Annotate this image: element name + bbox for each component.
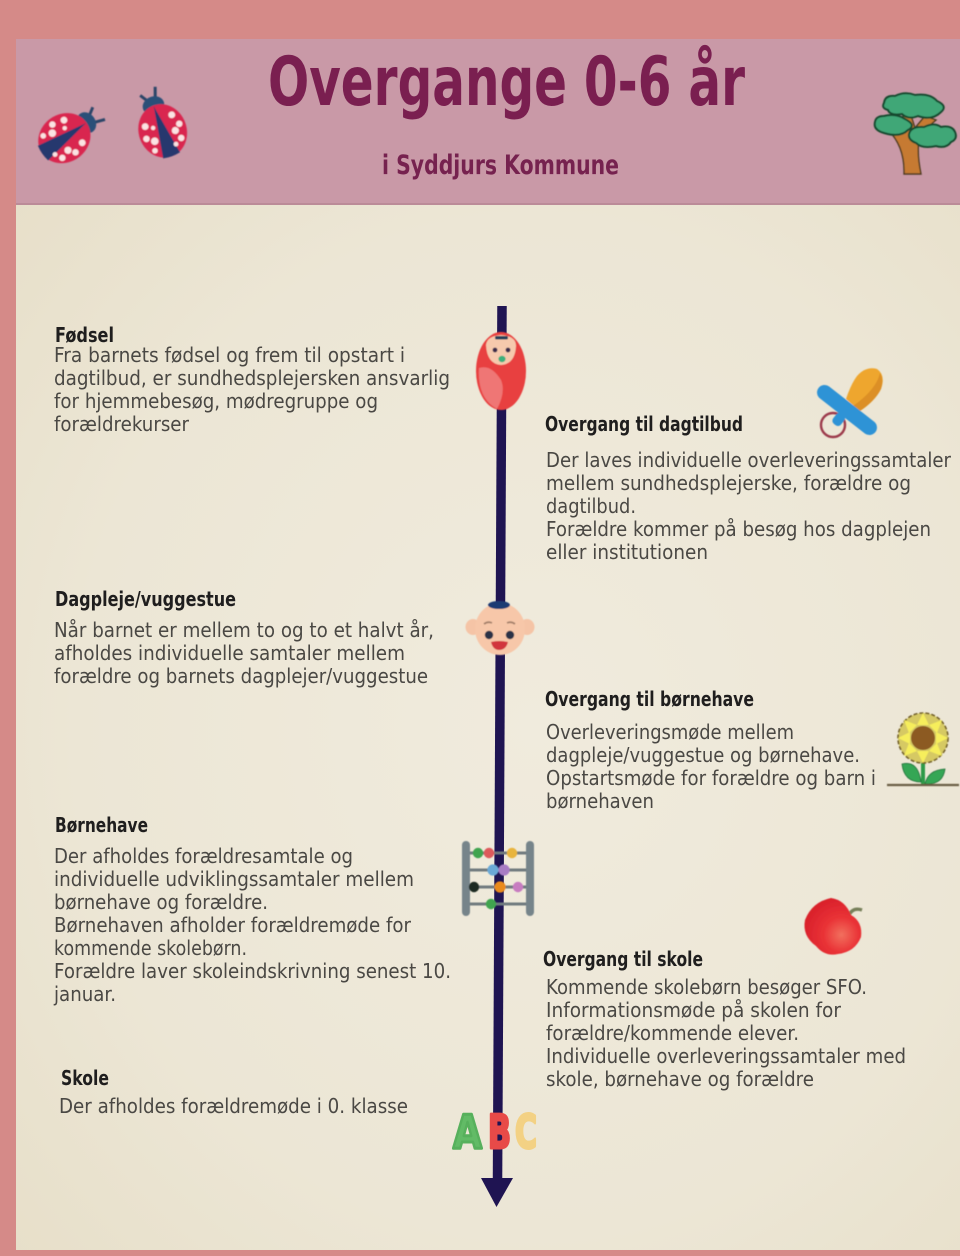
text block: Fødsel xyxy=(54,323,450,436)
timeline arrow xyxy=(481,306,513,1207)
text block: Overgang til skole xyxy=(543,947,906,1091)
text block: Skole: Der afholdes forældremøde i 0. klasse xyxy=(59,1094,408,1118)
icon: swaddled baby xyxy=(476,332,526,410)
text block: Børnehave: børnehave og forældre. xyxy=(54,890,268,914)
text block: Overgang til dagtilbud: dagtilbud. xyxy=(546,494,636,518)
icon: abacus xyxy=(462,841,534,916)
icon: ABC letters xyxy=(453,1105,537,1159)
icon: ABC letters: A xyxy=(453,1105,482,1159)
text block: Dagpleje/vuggestue: forældre og barnets dagplejer/vuggestue xyxy=(54,664,428,688)
text block: Børnehave xyxy=(53,813,451,1006)
text block: Overgang til dagtilbud: mellem sundhedsplejerske, forældre og xyxy=(546,471,911,495)
text block: Overgang til dagtilbud: Forældre kommer på besøg hos dagplejen xyxy=(546,517,931,541)
text block: Dagpleje/vuggestue xyxy=(54,587,434,688)
text block: Børnehave: individuelle udviklingssamtaler mellem xyxy=(54,867,414,891)
icon: baby head xyxy=(466,601,534,655)
text block: Overgang til skole: Individuelle overleveringssamtaler med xyxy=(546,1044,906,1068)
icon: pacifier xyxy=(814,368,883,438)
icon: tree xyxy=(875,93,956,174)
text block: Overgang til børnehave: dagpleje/vuggestue og børnehave. xyxy=(546,743,860,767)
text block: Børnehave: Der afholdes forældresamtale og xyxy=(54,844,353,868)
text block: Overgang til skole: skole, børnehave og forældre xyxy=(546,1067,814,1091)
text block: Overgang til skole: Kommende skolebørn besøger SFO. xyxy=(546,975,867,999)
icon: ABC letters: C xyxy=(515,1105,537,1159)
text block: Dagpleje/vuggestue: Dagpleje/vuggestue xyxy=(55,587,236,611)
text block: Børnehave: Børnehaven afholder forældremøde for xyxy=(54,913,412,937)
text block: Børnehave: Forældre laver skoleindskrivning senest 10. xyxy=(54,959,451,983)
text block: Fødsel: for hjemmebesøg, mødregruppe og xyxy=(54,389,378,413)
text block: Fødsel: Fra barnets fødsel og frem til opstart i xyxy=(54,343,405,367)
text block: Fødsel: Fødsel xyxy=(55,323,114,347)
text block: Børnehave: januar. xyxy=(53,982,116,1006)
text block: Skole xyxy=(59,1066,408,1118)
icon: sunflower xyxy=(887,713,959,785)
text block: Overgang til børnehave: Overleveringsmøde mellem xyxy=(546,720,794,744)
text block: Fødsel: dagtilbud, er sundhedsplejersken ansvarlig xyxy=(54,366,450,390)
text block: Fødsel: forældrekurser xyxy=(54,412,190,436)
text block: Børnehave: Børnehave xyxy=(55,813,148,837)
text block: Overgang til skole: forældre/kommende elever. xyxy=(546,1021,799,1045)
panel: header xyxy=(16,39,960,205)
text block: Overgang til børnehave: Overgang til børnehave xyxy=(545,687,754,711)
text block: Overgang til børnehave: Opstartsmøde for forældre og barn i xyxy=(546,766,876,790)
text block: Overgang til dagtilbud: eller institutionen xyxy=(546,540,708,564)
text block: Skole: Skole xyxy=(61,1066,109,1090)
icon: ABC letters: B xyxy=(488,1105,511,1159)
icon: ladybug right xyxy=(125,81,194,164)
text block: Dagpleje/vuggestue: afholdes individuelle samtaler mellem xyxy=(54,641,405,665)
icon: apple xyxy=(804,898,862,955)
text block: Børnehave: kommende skolebørn. xyxy=(54,936,247,960)
text block: Overgang til dagtilbud: Overgang til dagtilbud xyxy=(545,412,743,436)
text block: Overgang til børnehave: børnehaven xyxy=(546,789,654,813)
icon: ladybug left xyxy=(28,93,114,173)
text block: Dagpleje/vuggestue: Når barnet er mellem to og to et halvt år, xyxy=(54,618,434,642)
subtitle: i Syddjurs Kommune xyxy=(382,150,619,181)
text block: Overgang til skole: Overgang til skole xyxy=(543,947,703,971)
text block: Overgang til børnehave xyxy=(545,687,876,813)
text block: Overgang til dagtilbud xyxy=(545,412,952,564)
text block: Overgang til skole: Informationsmøde på skolen for xyxy=(546,998,842,1022)
title: Overgange 0-6 år xyxy=(268,43,745,122)
